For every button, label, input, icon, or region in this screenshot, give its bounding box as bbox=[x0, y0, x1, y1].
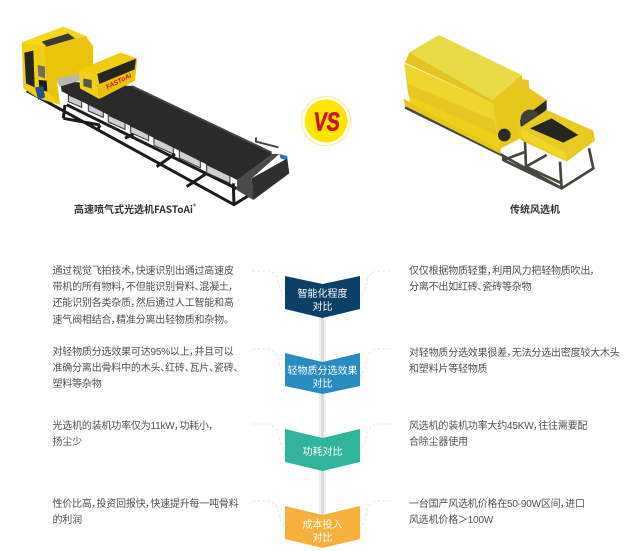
caption: right machine: 传统风选机 bbox=[510, 201, 560, 216]
left text 2 bbox=[52, 346, 238, 390]
left text 2: 对轻物质分选效果可达95%以上，并且可以 bbox=[52, 347, 234, 358]
left text 3: 扬尘少 bbox=[52, 437, 82, 448]
right text 4 bbox=[409, 498, 585, 526]
left text 1: 通过视觉飞拍技术，快速识别出通过高速皮 bbox=[52, 266, 234, 277]
chevron label 4: 成本投入 bbox=[302, 520, 342, 531]
dashed connectors bbox=[252, 271, 390, 529]
right text 3: 合除尘器使用 bbox=[409, 437, 468, 448]
chevron label 2 bbox=[288, 365, 358, 390]
left text 1: 速气阀相结合，精准分离出轻物质和杂物。 bbox=[52, 315, 229, 326]
left text 4: 性价比高，投资回报快，快速提升每一吨骨料 bbox=[52, 499, 238, 510]
chevron: power bbox=[285, 429, 360, 471]
left text 1: 还能识别各类杂质，然后通过人工智能和高 bbox=[52, 298, 234, 309]
chevron label 1 bbox=[298, 288, 348, 312]
chevron label 3: 功耗对比 bbox=[302, 447, 342, 458]
left text 3 bbox=[52, 420, 214, 448]
chevron: cost bbox=[285, 506, 360, 548]
left text 2: 准确分离出骨料中的木头、红砖、瓦片、瓷砖、 bbox=[52, 363, 238, 374]
chevron label 1: 智能化程度 bbox=[298, 289, 348, 300]
right text 4: 风选机价格＞100W bbox=[409, 515, 493, 526]
right text 1: 仅仅根据物质轻重，利用风力把轻物质吹出， bbox=[409, 266, 595, 277]
caption: left machine: 高速喷气式光选机FASToAi® bbox=[74, 201, 196, 216]
chevron label 4: 对比 bbox=[312, 532, 332, 544]
chevron: separation effect bbox=[285, 353, 360, 394]
chevron label 2: 对比 bbox=[312, 378, 332, 390]
left text 1: 带机的所有物料，不但能识别骨料、混凝土， bbox=[52, 282, 234, 293]
right text 2 bbox=[409, 347, 620, 375]
vertical connector line bbox=[319, 300, 326, 525]
chevron: intelligence bbox=[285, 276, 360, 318]
right text 3: 风选机的装机功率大约45KW，往往需要配 bbox=[409, 421, 587, 432]
right text 1: 分离不出如红砖、瓷砖等杂物 bbox=[409, 282, 531, 293]
left text 3: 光选机的装机功率仅为11kW，功耗小， bbox=[52, 421, 214, 432]
chevron label 1: 对比 bbox=[312, 302, 332, 312]
VS badge bbox=[302, 96, 350, 146]
right text 1 bbox=[409, 265, 595, 293]
right text 2: 和塑料片等轻物质 bbox=[409, 364, 487, 375]
chevron label 2: 轻物质分选效果 bbox=[288, 366, 358, 377]
VS badge: VS bbox=[312, 107, 342, 136]
left text 4 bbox=[52, 498, 238, 526]
chevron label 4 bbox=[302, 519, 342, 544]
right text 4: 一台国产风选机价格在50-90W区间，进口 bbox=[409, 499, 585, 510]
right text 3 bbox=[409, 420, 588, 448]
left text 4: 的利润 bbox=[52, 515, 82, 526]
left text 2: 塑料等杂物 bbox=[52, 379, 102, 390]
left text 1 bbox=[52, 265, 234, 326]
machine: FASToAi optical sorter bbox=[22, 27, 289, 205]
machine: traditional wind sorter bbox=[403, 35, 595, 188]
machine logo: FASToAi bbox=[105, 72, 133, 91]
right text 2: 对轻物质分选效果很差，无法分选出密度较大木头 bbox=[409, 348, 620, 359]
